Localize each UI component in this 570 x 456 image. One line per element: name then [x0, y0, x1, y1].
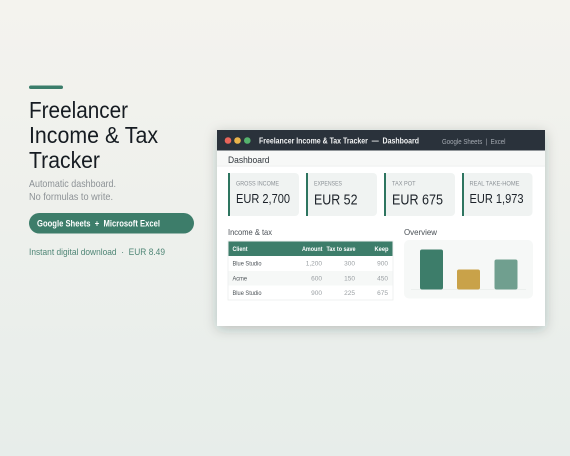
income table: [228, 241, 393, 300]
income table: 1,200: [306, 260, 322, 268]
income table: 225: [344, 290, 355, 297]
income table: 675: [377, 290, 388, 297]
price line: Instant digital download · EUR 8.49: [29, 247, 165, 258]
income table: 600: [311, 276, 322, 282]
card: gross income: EUR 2,700: [236, 191, 290, 206]
table header: Tax to save: [326, 246, 356, 253]
subtitle: Automatic dashboard.: [29, 178, 116, 190]
card: gross income: [228, 173, 299, 216]
title bar: [217, 130, 545, 150]
card: gross income: GROSS INCOME: [236, 180, 280, 188]
card: real take-home: EUR 1,973: [470, 191, 524, 206]
table rows: Blue Studio: [232, 290, 262, 297]
card: tax pot: TAX POT: [392, 180, 416, 188]
card: tax pot: [384, 173, 455, 216]
card: expenses: EUR 52: [314, 192, 358, 208]
accent bar: [29, 86, 63, 89]
bar chart: [404, 240, 533, 298]
left column: [29, 86, 194, 258]
title: Freelancer: [29, 97, 128, 123]
window dots: [225, 137, 251, 144]
income table: 900: [311, 290, 322, 297]
table header: Amount: [302, 246, 323, 253]
card: real take-home: [462, 173, 532, 216]
table header: [232, 246, 389, 253]
title: [29, 97, 158, 173]
income table: 300: [344, 260, 355, 268]
heading: overview: Overview: [404, 227, 438, 237]
card: tax pot: EUR 675: [392, 192, 443, 208]
table rows: [232, 260, 262, 297]
table rows: Acme: [232, 276, 247, 282]
platform pill: [29, 213, 194, 234]
title bar: Freelancer Income & Tax Tracker — Dashboard: [259, 136, 419, 146]
income table: 150: [344, 276, 355, 282]
platform pill: Google Sheets + Microsoft Excel: [37, 218, 160, 230]
heading: income and tax: Income & tax: [228, 227, 273, 237]
title bar: Google Sheets | Excel: [442, 139, 506, 146]
table rows: Blue Studio: [232, 260, 262, 268]
income table: 450: [377, 276, 388, 282]
card: expenses: [306, 173, 377, 216]
card: real take-home: REAL TAKE-HOME: [470, 180, 520, 188]
title: Tracker: [29, 147, 100, 173]
tab strip: [217, 150, 545, 166]
title: Income & Tax: [29, 122, 158, 148]
table header: Keep: [374, 246, 389, 253]
card: expenses: EXPENSES: [314, 180, 343, 188]
subtitle: No formulas to write.: [29, 191, 113, 203]
income table: 900: [377, 260, 388, 268]
dashboard window: [217, 130, 545, 326]
tab strip: Dashboard: [228, 155, 270, 166]
table header: Client: [232, 246, 248, 253]
subtitle: [29, 178, 116, 203]
